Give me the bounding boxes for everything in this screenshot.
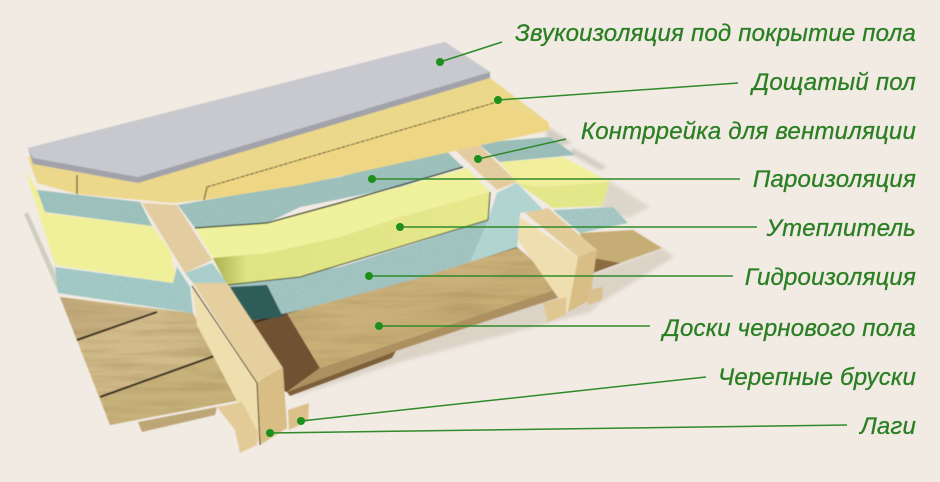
leader: subfloor boards [375,322,650,330]
leader: vapour barrier [368,175,740,183]
insulation: centre slab [195,168,490,285]
subfloor boards: centre [255,247,563,396]
beam: left front [192,283,287,445]
vapour barrier: left [37,190,152,226]
hydro barrier: right [553,207,628,233]
edge strip at far left [24,212,62,292]
label: hydro barrier: Гидроизоляция [745,264,916,291]
beam: left back [142,203,227,283]
label: counter batten: Контррейка для вентиляции [581,118,916,145]
beam: right front [518,208,597,312]
vapour barrier: centre [178,148,463,228]
insulation: right slab [500,157,610,208]
dark gap under insulation [250,313,320,392]
subfloor boards: right side [580,230,662,273]
hydro barrier: left [55,267,193,313]
leader: insulation [396,223,757,231]
label: vapour barrier: Пароизоляция [753,166,916,193]
label: skull bars: Черепные бруски [718,364,916,391]
grey sound insulation [28,42,490,183]
leader: sound insulation [436,42,502,66]
leader: skull bars [297,377,706,425]
sound-proof yellow floor board [28,78,550,203]
label: subfloor boards: Доски чернового пола [660,315,916,342]
leader: hydro barrier [365,272,733,280]
shadows on the ground [290,128,674,398]
floor cross-section illustration [24,42,674,453]
label: plank floor: Дощатый пол [749,69,916,96]
leader: counter batten [474,139,566,163]
label: joists: Лаги [858,413,916,440]
vapour barrier: right [477,137,575,162]
hydro barrier: centre [227,183,543,320]
label: insulation: Утеплитель [766,215,916,242]
leader: plank floor [494,83,738,104]
label: sound insulation: Звукоизоляция под покрытие пола [515,20,916,47]
beam: right back [452,143,517,190]
leader: joists [266,425,847,437]
skull bars [217,287,603,453]
subfloor boards: left side [60,297,240,432]
insulation: left slab [25,170,175,283]
